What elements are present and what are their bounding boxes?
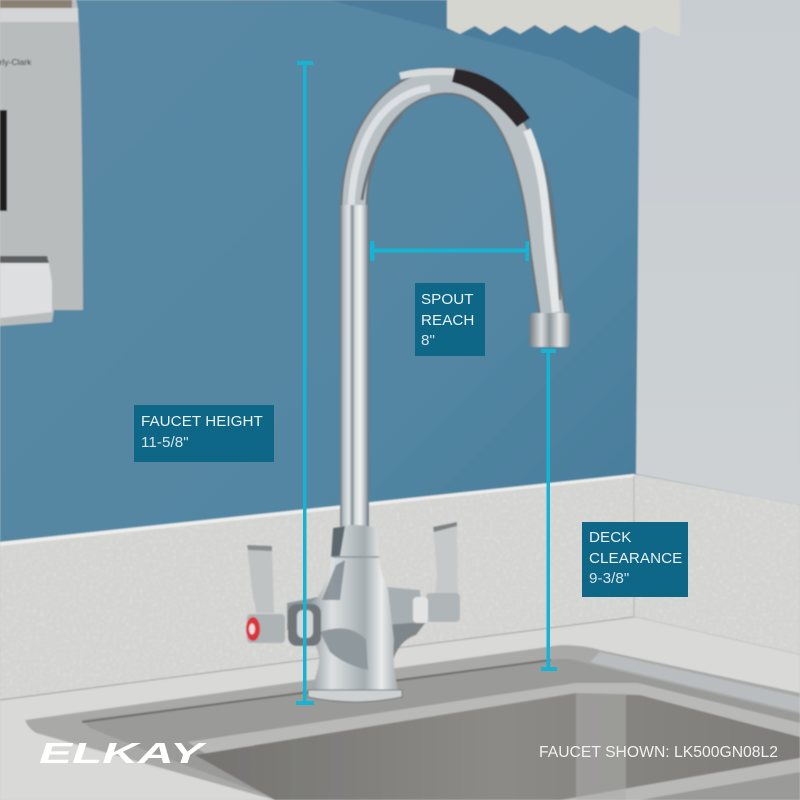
- label: deck clearance: DECK: [589, 529, 631, 546]
- sink rim: [25, 645, 800, 800]
- base body: [300, 525, 398, 690]
- Elkay logo: ELKAY: [39, 738, 208, 770]
- dimension: deck clearance: [541, 349, 557, 671]
- counter: [0, 617, 800, 800]
- dimension: spout reach: [370, 241, 529, 261]
- label: deck clearance: [582, 522, 688, 597]
- towel dispenser top: [447, 0, 680, 36]
- faucet model caption: FAUCET SHOWN: LK500GN08L2: [539, 744, 778, 761]
- backsplash: [0, 474, 800, 800]
- label: spout reach: REACH: [421, 312, 474, 328]
- label: faucet height: 11-5/8": [141, 434, 189, 450]
- left handle: [247, 545, 274, 613]
- aerator: [529, 313, 570, 347]
- label: faucet height: FAUCET HEIGHT: [141, 413, 263, 430]
- label: spout reach: 8": [421, 332, 435, 349]
- label: spout reach: SPOUT: [421, 291, 474, 308]
- right handle: [433, 522, 458, 603]
- dimension: faucet height: [296, 61, 314, 705]
- wall dispenser: [0, 0, 83, 326]
- faucet: [246, 69, 570, 702]
- right grey wall: [636, 0, 800, 505]
- lower arms: [390, 622, 426, 660]
- label: deck clearance: CLEARANCE: [589, 550, 682, 566]
- sink basin: [195, 693, 800, 800]
- spout: [354, 81, 553, 318]
- label: spout reach: [415, 283, 485, 356]
- label: deck clearance: 9-3/8": [589, 570, 629, 587]
- label: faucet height: [134, 405, 274, 462]
